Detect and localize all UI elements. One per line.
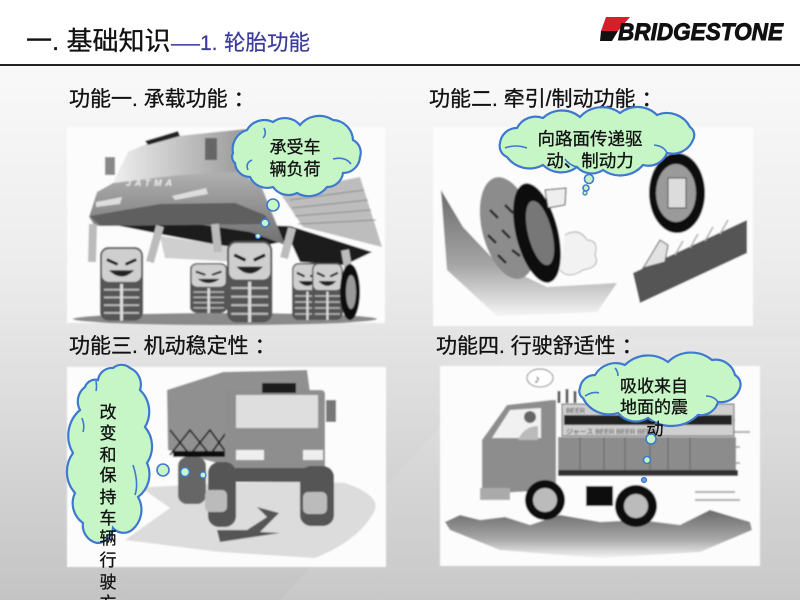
callout: traction and braking: 向路面传递驱 bbox=[538, 129, 642, 149]
mirror bbox=[326, 400, 336, 422]
title: 轮胎功能 bbox=[224, 31, 310, 55]
callout: traction and braking bbox=[500, 107, 694, 195]
panel: traction and braking illustration bbox=[433, 127, 753, 326]
panel: ride comfort truck illustration: ♪ bbox=[534, 372, 540, 386]
right dual tires bbox=[292, 263, 323, 320]
panel: load-bearing truck illustration bbox=[67, 127, 385, 325]
rope net bbox=[170, 430, 228, 455]
left tire sidewall bbox=[504, 178, 570, 288]
beer crates: ジャース BEER BEER BEER bbox=[566, 428, 656, 436]
heading: function one: 功能一. 承载功能 ： bbox=[69, 88, 255, 111]
driver bbox=[524, 411, 536, 423]
rear wheel bbox=[615, 485, 657, 527]
heading: function two: 功能二. 牵引/制动功能 ： bbox=[429, 88, 663, 111]
title: 1. bbox=[200, 32, 218, 55]
callout: load bearing: 辆负荷 bbox=[270, 160, 320, 179]
right slope bbox=[633, 220, 747, 303]
heading: function four: 功能四. 行驶舒适性 ： bbox=[436, 335, 643, 358]
cab bbox=[225, 390, 325, 482]
logo: Bridgestone: BRIDGESTONE bbox=[618, 19, 784, 46]
front right tire bbox=[300, 466, 334, 526]
callout: handling stability: 和 bbox=[100, 446, 116, 465]
left soil bank bbox=[441, 190, 617, 316]
back-left tires bbox=[190, 263, 227, 313]
gloved hand bbox=[545, 188, 566, 208]
callout: handling stability: 驶 bbox=[100, 573, 116, 592]
panel: load-bearing truck illustration: JATMA bbox=[126, 178, 172, 188]
title: — bbox=[171, 32, 200, 55]
callout: handling stability: 持 bbox=[100, 488, 116, 507]
callout: handling stability: 保 bbox=[100, 466, 116, 485]
truck roof and windscreen bbox=[113, 129, 262, 183]
callout: ride comfort: 动 bbox=[646, 420, 664, 439]
callout: ride comfort bbox=[579, 353, 741, 482]
truck bed bbox=[558, 437, 736, 471]
front wheel bbox=[525, 480, 565, 520]
cargo box bbox=[280, 177, 382, 247]
cab bbox=[482, 400, 556, 495]
bumper bbox=[232, 468, 324, 482]
truck cab front bbox=[89, 172, 285, 245]
title bbox=[26, 26, 310, 56]
callout: handling stability: 辆 bbox=[100, 529, 116, 548]
music note bubble bbox=[527, 369, 553, 387]
front bumper bbox=[480, 488, 510, 500]
panel: ride comfort truck illustration bbox=[440, 366, 760, 566]
front left tire bbox=[208, 462, 236, 527]
road arrow bbox=[217, 507, 280, 542]
left tire tread bbox=[470, 171, 546, 285]
road bbox=[125, 482, 376, 558]
dust cloud bbox=[560, 232, 596, 275]
cab window bbox=[492, 408, 541, 438]
front-right tire bbox=[227, 241, 272, 322]
front-left tire bbox=[100, 247, 143, 321]
truck underbody bbox=[100, 222, 372, 265]
title: 一. 基础知识 bbox=[26, 26, 170, 56]
panel: manoeuvrability truck illustration bbox=[67, 367, 386, 567]
rear tire bbox=[178, 457, 206, 504]
beer crates: BEER bbox=[566, 408, 585, 415]
ground shadow bbox=[73, 313, 377, 325]
heading: function three: 功能三. 机动稳定性 ： bbox=[69, 335, 276, 358]
windscreen bbox=[236, 395, 318, 428]
callout: handling stability: 行 bbox=[100, 551, 116, 570]
callout: handling stability: 变 bbox=[100, 424, 116, 443]
headlights bbox=[236, 450, 264, 460]
right wheel bbox=[649, 153, 705, 233]
right boot bbox=[643, 240, 668, 268]
tarp cover bbox=[167, 370, 310, 465]
callout: traction and braking: 动、制动力 bbox=[546, 151, 634, 171]
callout: handling stability: 车 bbox=[100, 509, 116, 528]
battery box bbox=[586, 486, 613, 506]
callout: handling stability bbox=[67, 365, 206, 600]
callout: ride comfort: 吸收来自 bbox=[620, 377, 688, 396]
callout: handling stability: 改 bbox=[100, 403, 116, 422]
beer crates bbox=[562, 404, 734, 436]
callout: load bearing bbox=[232, 116, 361, 238]
callout: ride comfort: 地面的震 bbox=[620, 398, 688, 417]
bumper stripe bbox=[90, 203, 270, 226]
suspension arms bbox=[92, 224, 352, 290]
ground bbox=[445, 510, 752, 558]
mirrors bbox=[105, 157, 115, 175]
speed lines bbox=[690, 420, 750, 500]
callout: load bearing: 承受车 bbox=[270, 138, 320, 157]
